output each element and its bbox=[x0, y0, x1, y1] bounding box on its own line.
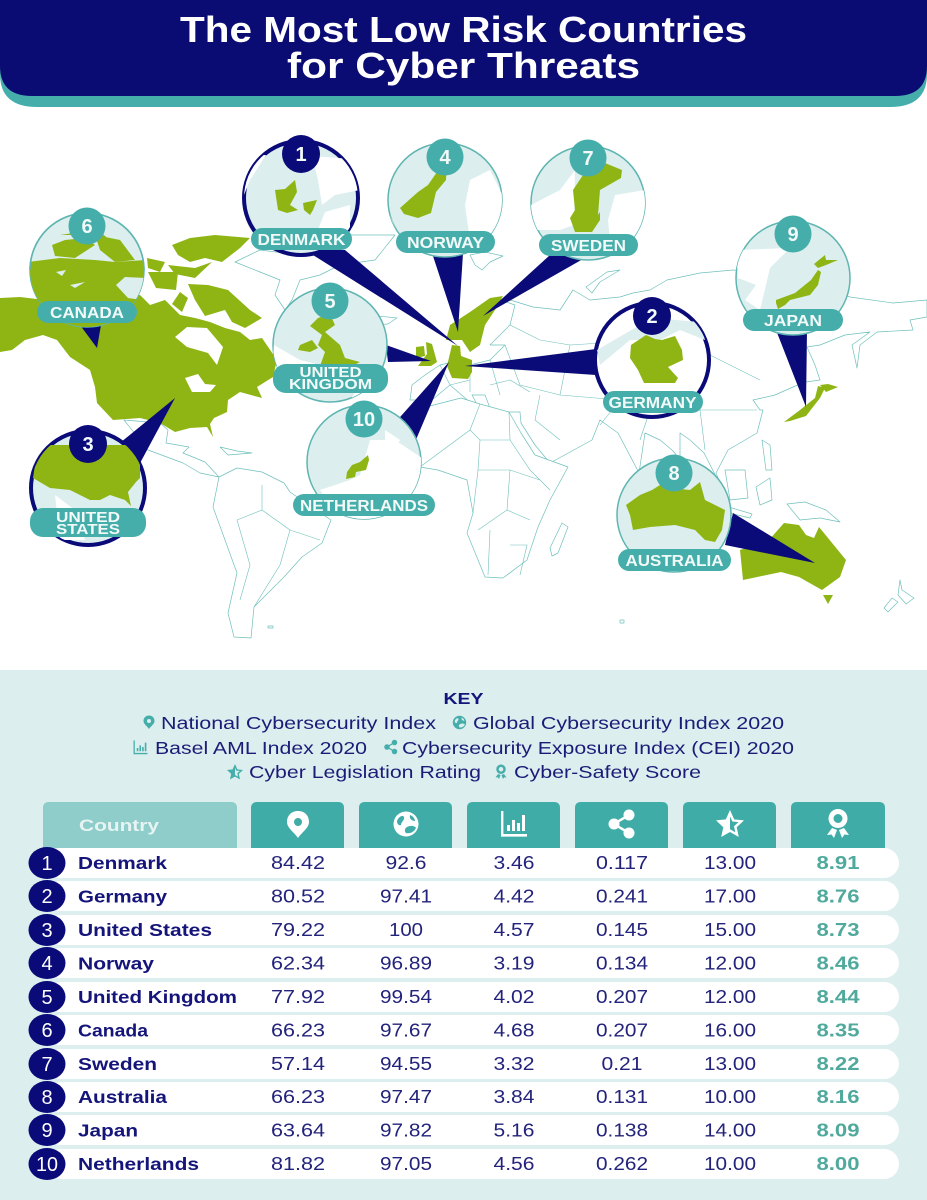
table row: Japan: 63.64 bbox=[271, 1120, 325, 1140]
table row: United Kingdom: 77.92 bbox=[271, 987, 325, 1007]
table row: United States: 3 bbox=[41, 920, 53, 942]
bubble: United Kingdom rank 5: 5 bbox=[324, 291, 336, 313]
table row: Canada: 97.67 bbox=[380, 1020, 432, 1040]
table row: United States: 15.00 bbox=[704, 920, 756, 940]
title: The Most Low Risk Countries bbox=[180, 9, 747, 50]
bubble: Norway rank 4: 4 bbox=[439, 147, 451, 169]
bubble: Japan rank 9: JAPAN bbox=[764, 313, 822, 330]
table row: Japan bbox=[28, 1114, 899, 1146]
bubble: United Kingdom rank 5 bbox=[270, 282, 390, 402]
table row: Norway: 4 bbox=[41, 953, 53, 975]
table row: Germany: 17.00 bbox=[704, 886, 756, 906]
table row: Denmark: 84.42 bbox=[271, 853, 325, 873]
table row: United States: 79.22 bbox=[271, 920, 325, 940]
table row: Canada: 4.68 bbox=[494, 1020, 534, 1040]
bubble: United Kingdom rank 5: UNITED bbox=[300, 364, 362, 381]
table row: Germany: 2 bbox=[41, 886, 53, 908]
table row: Germany: 97.41 bbox=[380, 886, 432, 906]
table row: Sweden: 3.32 bbox=[494, 1054, 534, 1074]
table row: United Kingdom: 4.02 bbox=[494, 987, 534, 1007]
table row: United Kingdom: 5 bbox=[41, 987, 53, 1009]
table row: United Kingdom: 0.207 bbox=[596, 987, 648, 1007]
table row: Australia: 8 bbox=[41, 1087, 53, 1109]
Scandinavia highlight bbox=[446, 296, 503, 352]
bubble: Canada rank 6: CANADA bbox=[50, 305, 124, 322]
table row: Australia: 97.47 bbox=[380, 1087, 432, 1107]
table row: Netherlands: 10.00 bbox=[704, 1154, 756, 1174]
table row: Norway: Norway bbox=[78, 954, 154, 974]
table row: Denmark: 13.00 bbox=[704, 853, 756, 873]
key: Basel AML Index 2020: Basel AML Index 2020 bbox=[155, 738, 367, 758]
table row: Sweden: 0.21 bbox=[602, 1054, 642, 1074]
table row: Norway: 62.34 bbox=[271, 954, 325, 974]
bubble: Denmark rank 1: 1 bbox=[295, 144, 307, 166]
bubble: Canada rank 6: 6 bbox=[81, 216, 93, 238]
bubble: Japan rank 9: 9 bbox=[787, 224, 799, 246]
table row: Norway: 8.46 bbox=[816, 954, 860, 974]
bubble: Sweden rank 7: 7 bbox=[582, 148, 594, 170]
UK and Ireland highlight bbox=[416, 342, 437, 366]
table row: Japan: 5.16 bbox=[494, 1120, 534, 1140]
table row: Sweden: 94.55 bbox=[380, 1054, 432, 1074]
table row: Australia: 0.131 bbox=[596, 1087, 648, 1107]
bubble: United States rank 3: STATES bbox=[56, 521, 120, 538]
table row: Japan: 8.09 bbox=[816, 1120, 860, 1140]
table row: Canada: 16.00 bbox=[704, 1020, 756, 1040]
table row: Canada: 6 bbox=[41, 1020, 53, 1042]
table row: Japan: Japan bbox=[78, 1120, 138, 1140]
table row: United States bbox=[28, 914, 899, 946]
bubble: Sweden rank 7 bbox=[530, 140, 645, 260]
table row: Sweden: 57.14 bbox=[271, 1054, 325, 1074]
bubble: United States rank 3: UNITED bbox=[56, 509, 120, 526]
table row: Australia: 3.84 bbox=[494, 1087, 534, 1107]
bubble: Australia rank 8: AUSTRALIA bbox=[626, 553, 724, 570]
table header bbox=[43, 802, 885, 848]
key: Cybersecurity Exposure Index: Cybersecurity Exposure Index (CEI) 2020 bbox=[402, 738, 794, 758]
bubble: Denmark rank 1: DENMARK bbox=[258, 232, 346, 249]
key: Cyber-Safety Score: Cyber-Safety Score bbox=[514, 762, 701, 782]
table row: Denmark bbox=[28, 847, 899, 879]
bubble: Sweden rank 7: SWEDEN bbox=[551, 238, 626, 255]
table row: Germany: 0.241 bbox=[596, 886, 648, 906]
table row: Netherlands: 8.00 bbox=[816, 1154, 860, 1174]
bubble: Netherlands rank 10: 10 bbox=[353, 409, 375, 431]
bubble: Norway rank 4 bbox=[388, 138, 505, 257]
table row: Denmark: 8.91 bbox=[816, 853, 860, 873]
table row: Germany: Germany bbox=[78, 886, 167, 906]
Tasmania bbox=[823, 595, 833, 604]
bubble: Australia rank 8: 8 bbox=[668, 463, 680, 485]
table row: Denmark: 0.117 bbox=[596, 853, 648, 873]
table row: Australia: 66.23 bbox=[271, 1087, 325, 1107]
table row: Canada bbox=[28, 1014, 899, 1046]
bubble: Germany rank 2 bbox=[595, 297, 709, 417]
table row: Germany: 8.76 bbox=[816, 886, 860, 906]
table row: Norway: 0.134 bbox=[596, 954, 648, 974]
table row: Australia: 8.16 bbox=[816, 1087, 860, 1107]
table row: Norway: 96.89 bbox=[380, 954, 432, 974]
key bbox=[134, 691, 794, 782]
table row: United States: 0.145 bbox=[596, 920, 648, 940]
table row: Norway: 3.19 bbox=[494, 954, 534, 974]
table row: Netherlands: 0.262 bbox=[596, 1154, 648, 1174]
North America highlight bbox=[0, 295, 277, 437]
key heading: KEY bbox=[444, 691, 484, 708]
table header: Country bbox=[79, 816, 160, 835]
Japan highlight bbox=[784, 384, 838, 422]
table row: Norway bbox=[28, 947, 899, 979]
table row: Japan: 97.82 bbox=[380, 1120, 432, 1140]
table row: Canada: 8.35 bbox=[816, 1020, 860, 1040]
bubble: Netherlands rank 10: NETHERLANDS bbox=[300, 498, 428, 515]
table row: United States: 8.73 bbox=[816, 920, 860, 940]
table row: United Kingdom: 99.54 bbox=[380, 987, 432, 1007]
table row: Australia: 10.00 bbox=[704, 1087, 756, 1107]
table row: United States: 100 bbox=[389, 920, 423, 940]
table row: Denmark: Denmark bbox=[78, 853, 167, 873]
world map bbox=[0, 235, 927, 638]
bubble: Australia rank 8 bbox=[617, 454, 731, 572]
table row: Netherlands: 81.82 bbox=[271, 1154, 325, 1174]
table row: United Kingdom bbox=[28, 981, 899, 1013]
table row: Sweden: 8.22 bbox=[816, 1054, 860, 1074]
table row: Canada: 66.23 bbox=[271, 1020, 325, 1040]
bubble: Canada rank 6 bbox=[28, 208, 146, 330]
table row: Sweden: 7 bbox=[41, 1054, 53, 1076]
table row: United Kingdom: 12.00 bbox=[704, 987, 756, 1007]
table row: Australia bbox=[28, 1081, 899, 1113]
bubble: Germany rank 2: 2 bbox=[646, 306, 658, 328]
Arctic islands bbox=[147, 235, 262, 328]
bubble: Japan rank 9 bbox=[736, 216, 850, 335]
table row: United Kingdom: United Kingdom bbox=[78, 987, 237, 1007]
table row: Germany bbox=[28, 880, 899, 912]
key: National Cybersecurity Index: National Cybersecurity Index bbox=[161, 713, 436, 733]
bubble: Norway rank 4: NORWAY bbox=[407, 235, 484, 252]
table row: Australia: Australia bbox=[78, 1087, 167, 1107]
table row: Canada: Canada bbox=[78, 1020, 148, 1040]
table row: Germany: 80.52 bbox=[271, 886, 325, 906]
table row: Japan: 14.00 bbox=[704, 1120, 756, 1140]
table row: Sweden: Sweden bbox=[78, 1054, 157, 1074]
table row: Canada: 0.207 bbox=[596, 1020, 648, 1040]
table row: Netherlands: 4.56 bbox=[494, 1154, 534, 1174]
table row: United States: 4.57 bbox=[494, 920, 534, 940]
bubble: United States rank 3 bbox=[30, 425, 146, 545]
panel: key and table background bbox=[0, 670, 927, 1200]
key: Cyber Legislation Rating: Cyber Legislation Rating bbox=[249, 762, 481, 782]
table row: Sweden: 13.00 bbox=[704, 1054, 756, 1074]
table row: Netherlands: Netherlands bbox=[78, 1154, 199, 1174]
bubble: United Kingdom rank 5: KINGDOM bbox=[289, 376, 372, 393]
table row: Japan: 0.138 bbox=[596, 1120, 648, 1140]
table row: Sweden bbox=[28, 1048, 899, 1080]
table row: United Kingdom: 8.44 bbox=[816, 987, 860, 1007]
Australia highlight bbox=[740, 523, 846, 590]
Great Lakes bbox=[185, 374, 216, 392]
bubble: Netherlands rank 10 bbox=[293, 400, 435, 520]
Hudson Bay bbox=[175, 327, 223, 365]
table row: Netherlands bbox=[28, 1148, 899, 1180]
table row: Norway: 12.00 bbox=[704, 954, 756, 974]
pointer wedges bbox=[80, 250, 815, 563]
title banner: for Cyber Threats bbox=[287, 45, 640, 86]
borders bbox=[237, 325, 760, 607]
table row: Denmark: 1 bbox=[41, 853, 53, 875]
table row: Japan: 9 bbox=[41, 1120, 53, 1142]
bubble: Germany rank 2: GERMANY bbox=[608, 395, 697, 412]
table row: Germany: 4.42 bbox=[494, 886, 534, 906]
table row: Netherlands: 97.05 bbox=[380, 1154, 432, 1174]
title banner bbox=[0, 0, 927, 107]
bubble: Denmark rank 1 bbox=[244, 135, 365, 255]
table row: Netherlands: 10 bbox=[36, 1154, 58, 1176]
table row: Denmark: 3.46 bbox=[494, 853, 534, 873]
Germany Denmark Netherlands highlight bbox=[447, 345, 472, 379]
table row: Denmark: 92.6 bbox=[386, 853, 426, 873]
outlined continents bbox=[124, 235, 927, 638]
table row: United States: United States bbox=[78, 920, 212, 940]
bubble: United States rank 3: 3 bbox=[82, 434, 94, 456]
key: Global Cybersecurity Index 2020: Global Cybersecurity Index 2020 bbox=[473, 713, 784, 733]
